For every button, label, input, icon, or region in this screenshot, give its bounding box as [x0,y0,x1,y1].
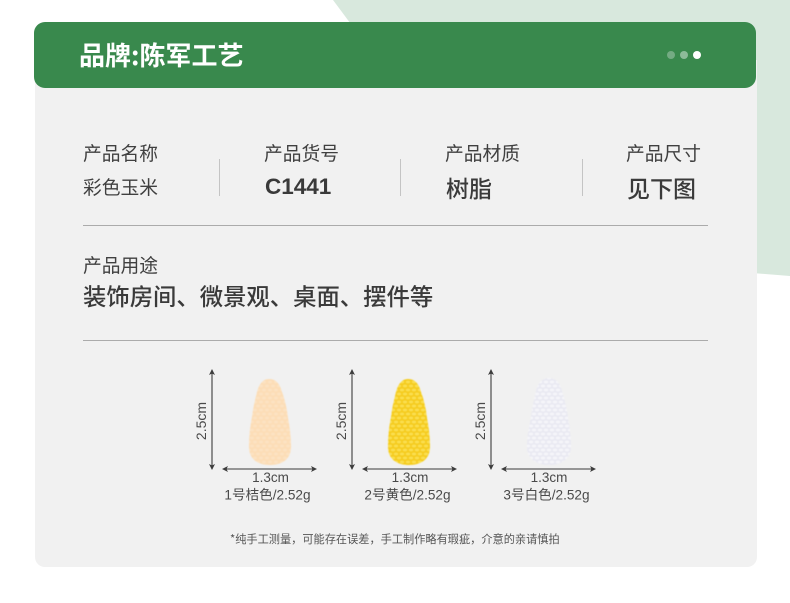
title: 品牌:陈军工艺 [79,36,243,73]
text block: product usage [83,251,433,312]
panel: product details card [35,60,757,567]
spec: product material [445,139,520,204]
corn item 1: orange [193,370,316,502]
spec: product number: 产品货号 [264,139,339,166]
icon: orange corn [249,379,291,465]
corn item 2: yellow [333,370,456,502]
spec: product number: C1441 [265,174,331,199]
spec: product name: 彩色玉米 [83,173,158,200]
spec: product material: 产品材质 [445,139,520,166]
dimension arrows [491,370,595,469]
width label: 1.3cm [252,470,289,485]
height label: 2.5cm [193,402,209,440]
spec: product name [83,139,158,200]
footnote: *纯手工测量，可能存在误差，手工制作略有瑕疵，介意的亲请慎拍 [230,531,560,547]
height label: 2.5cm [472,402,488,440]
spec: product number [264,139,339,199]
spec: product size [626,139,701,204]
icon: yellow corn [388,379,430,465]
corn item 3: white [472,370,595,502]
spec: product material: 树脂 [446,170,492,204]
height label: 2.5cm [333,402,349,440]
text block: product usage: 装饰房间、微景观、桌面、摆件等 [83,278,433,312]
header: green brand bar [34,22,756,88]
width label: 1.3cm [531,470,567,485]
spec: product size: 见下图 [627,170,696,204]
dimension arrows [212,370,316,469]
spec: product size: 产品尺寸 [626,139,701,166]
dimension arrows [352,370,456,469]
caption: 3号白色/2.52g [503,486,590,502]
caption: 1号桔色/2.52g [224,486,311,502]
pagination dots [667,51,701,59]
width label: 1.3cm [392,470,428,485]
caption: 2号黄色/2.52g [364,486,451,502]
text block: product usage: 产品用途 [83,251,158,278]
spec: product name: 产品名称 [83,139,158,166]
icon: white corn [527,378,571,465]
